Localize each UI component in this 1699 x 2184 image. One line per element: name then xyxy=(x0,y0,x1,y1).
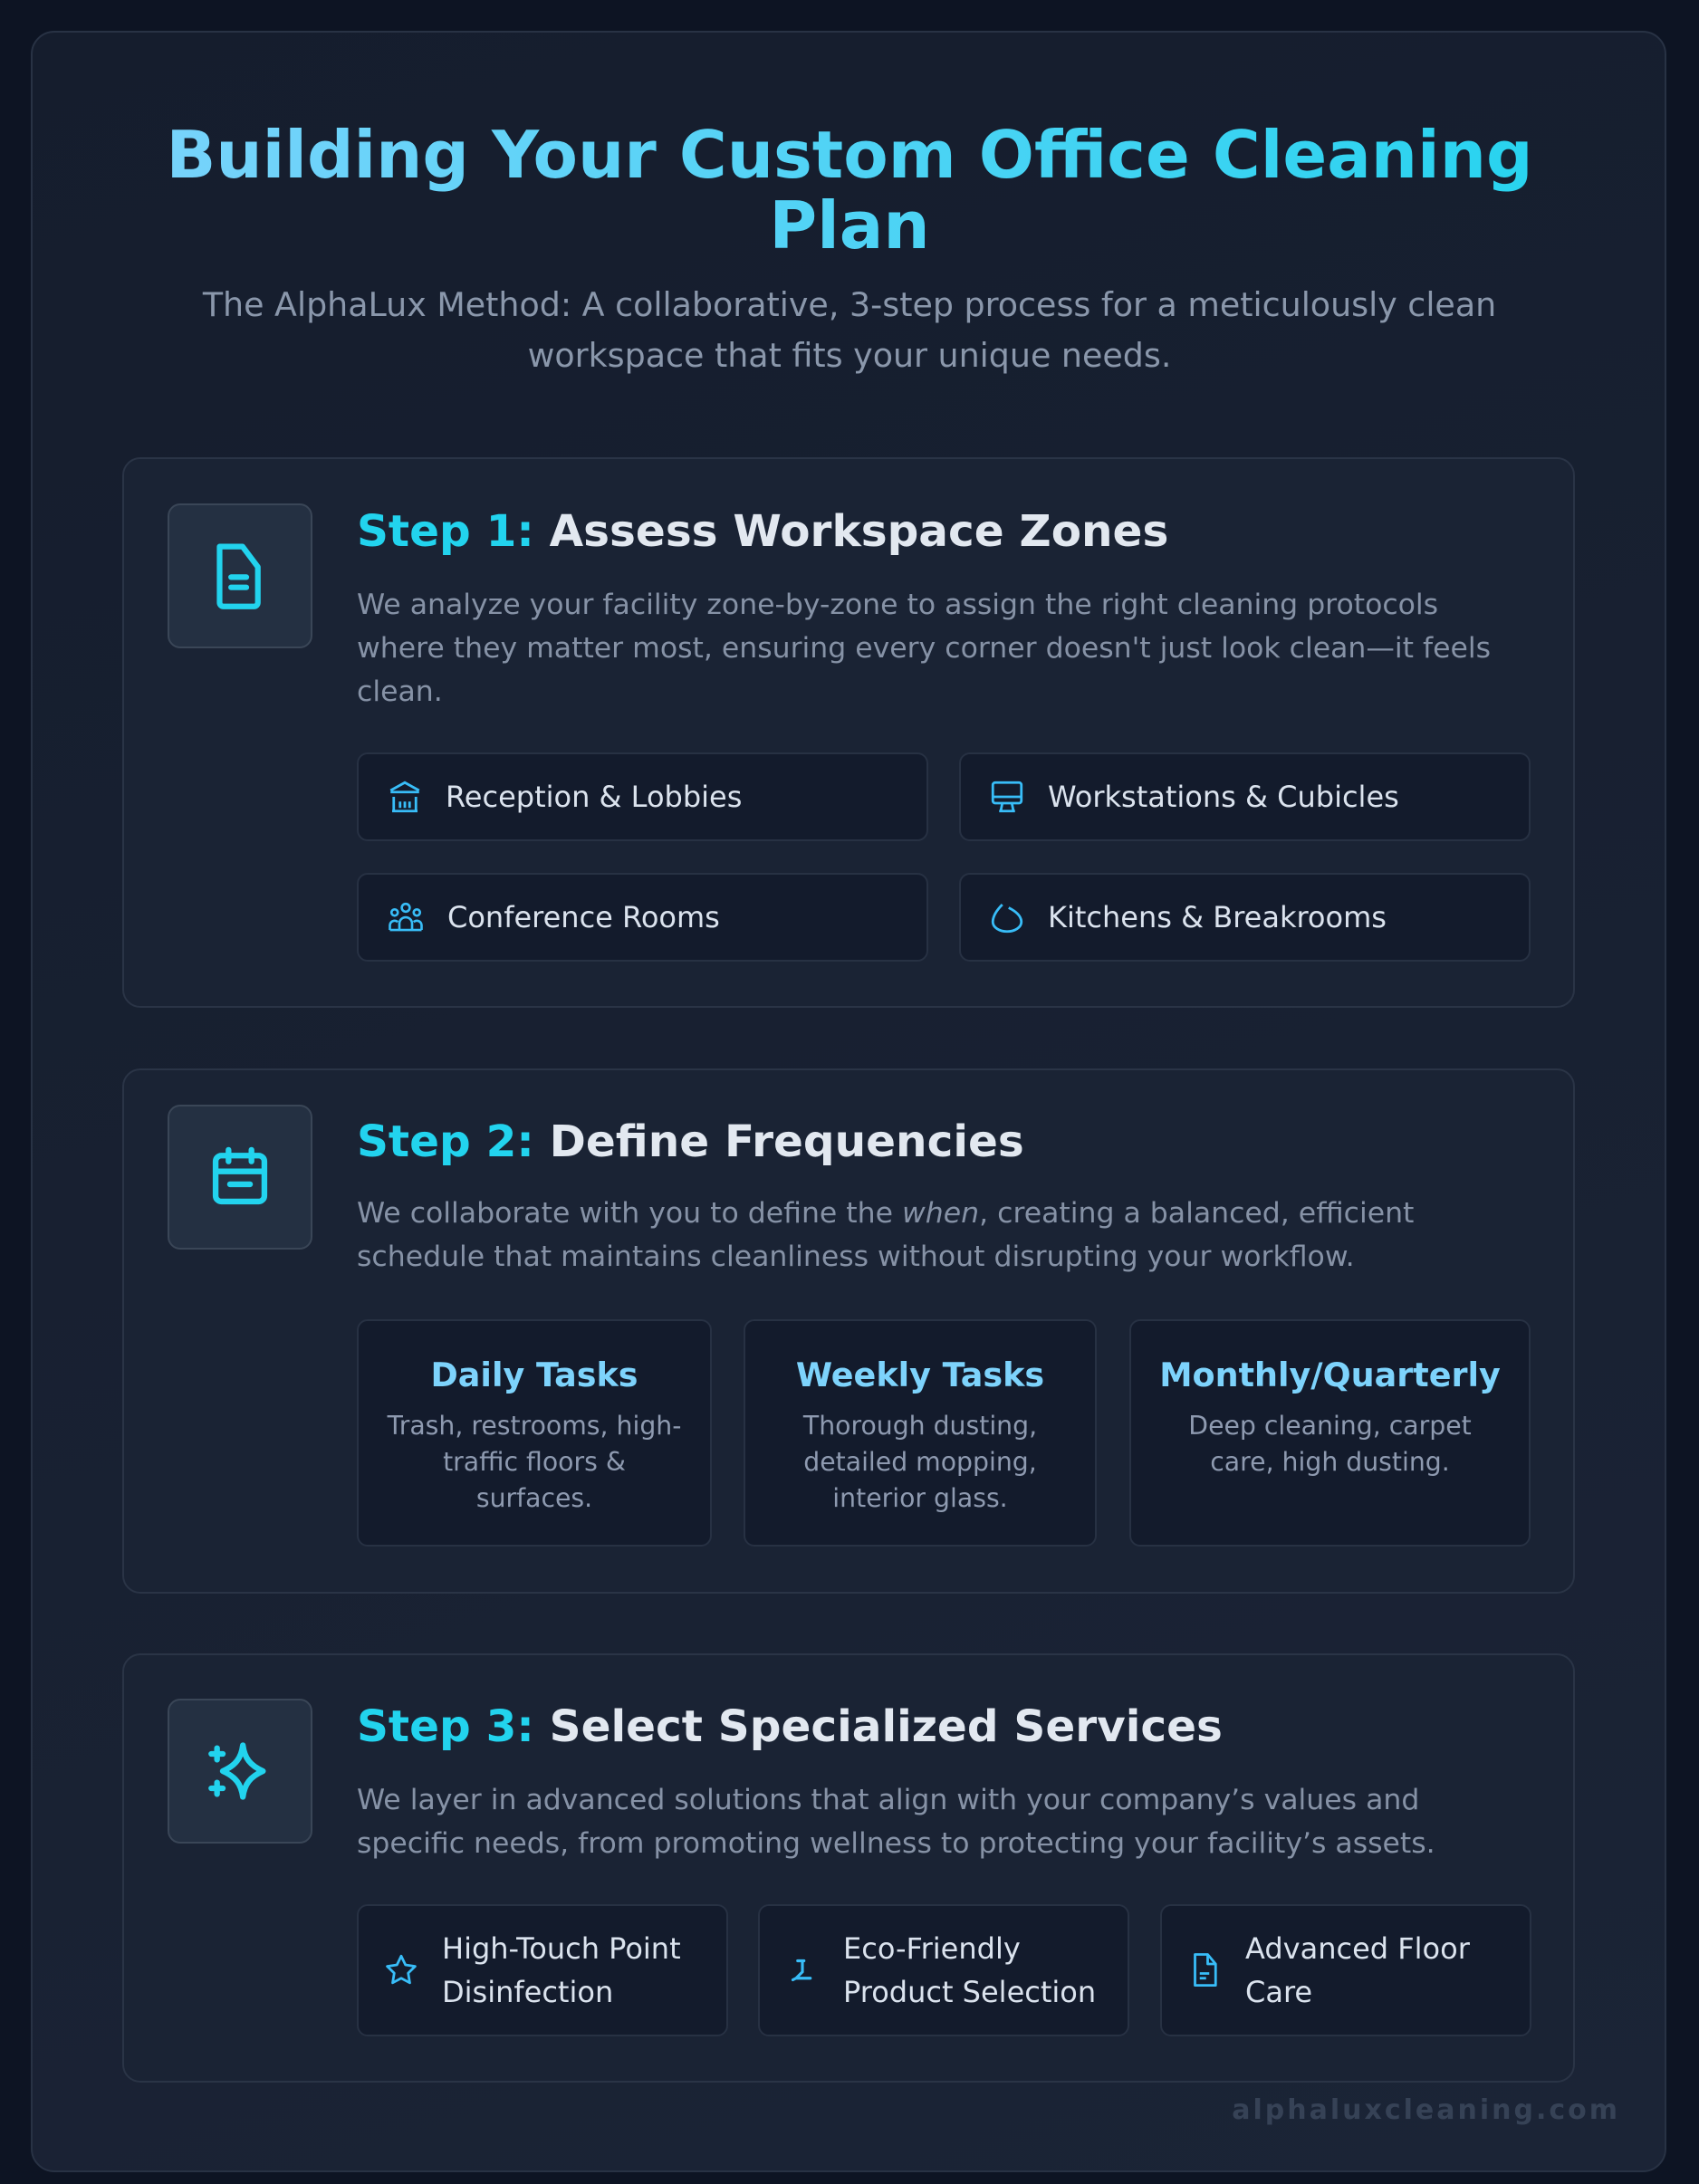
panel: step 2 xyxy=(122,1068,1575,1594)
panel: step 1 xyxy=(122,457,1575,1008)
zone: workstations: Workstations & Cubicles xyxy=(1048,780,1399,814)
step 3 description: We layer in advanced solutions that align with your company’s values and specific needs, from promoting wellness to protecting your facility’s assets. xyxy=(357,1784,1435,1860)
title: Plan xyxy=(769,187,930,263)
frequency: weekly: Weekly Tasks xyxy=(796,1355,1044,1394)
service: disinfection: High-Touch Point xyxy=(442,1931,681,1966)
zone: reception xyxy=(357,752,928,841)
service: disinfection xyxy=(357,1904,728,2036)
frequency: daily: Daily Tasks xyxy=(431,1355,638,1394)
title xyxy=(54,120,1645,261)
frequency: monthly: Deep cleaning, carpet care, high dusting. xyxy=(1188,1411,1472,1477)
zone: conference: Conference Rooms xyxy=(447,900,720,934)
zone: reception: Reception & Lobbies xyxy=(446,780,742,814)
step 1 description: We analyze your facility zone-by-zone to assign the right cleaning protocols where they matter most, ensuring every corner doesn't just look clean—it feels clean. xyxy=(357,589,1491,708)
step 2 heading: Step 2: Define Frequencies xyxy=(357,1116,1024,1167)
service: floor care: Advanced Floor xyxy=(1245,1931,1470,1966)
zone: kitchens: Kitchens & Breakrooms xyxy=(1048,900,1387,934)
frequency: daily: Trash, restrooms, high-traffic floors & surfaces. xyxy=(388,1411,681,1513)
service: eco-friendly: Product Selection xyxy=(843,1975,1096,2009)
title: Building Your Custom Office Cleaning xyxy=(166,117,1533,193)
icon: document xyxy=(168,503,312,648)
service: eco-friendly xyxy=(758,1904,1129,2036)
service: floor care xyxy=(1160,1904,1531,2036)
icon: calendar xyxy=(168,1105,312,1250)
zone: conference xyxy=(357,873,928,962)
frequency: weekly xyxy=(744,1319,1097,1547)
subtitle xyxy=(203,285,1496,375)
footer url: alphaluxcleaning.com xyxy=(1232,2094,1620,2126)
zone: kitchens xyxy=(959,873,1531,962)
frequency: monthly: Monthly/Quarterly xyxy=(1159,1355,1501,1394)
step 1 heading: Step 1: Assess Workspace Zones xyxy=(357,506,1168,557)
step 2 description: We collaborate with you to define the when, creating a balanced, efficient schedule that maintains cleanliness without disrupting your workflow. xyxy=(357,1197,1414,1273)
service: disinfection: Disinfection xyxy=(442,1975,613,2009)
subtitle: The AlphaLux Method: A collaborative, 3-step process for a meticulously clean xyxy=(203,285,1496,324)
frequency: weekly: Thorough dusting, detailed mopping, interior glass. xyxy=(803,1411,1037,1513)
service: eco-friendly: Eco-Friendly xyxy=(843,1931,1021,1966)
frequency: monthly xyxy=(1129,1319,1531,1547)
zone: workstations xyxy=(959,752,1531,841)
icon: sparkle xyxy=(168,1699,312,1844)
step 3 heading: Step 3: Select Specialized Services xyxy=(357,1701,1223,1752)
subtitle: workspace that fits your unique needs. xyxy=(528,336,1171,375)
frequency: daily xyxy=(357,1319,712,1547)
service: floor care: Care xyxy=(1245,1975,1312,2009)
panel: step 3 xyxy=(122,1653,1575,2083)
